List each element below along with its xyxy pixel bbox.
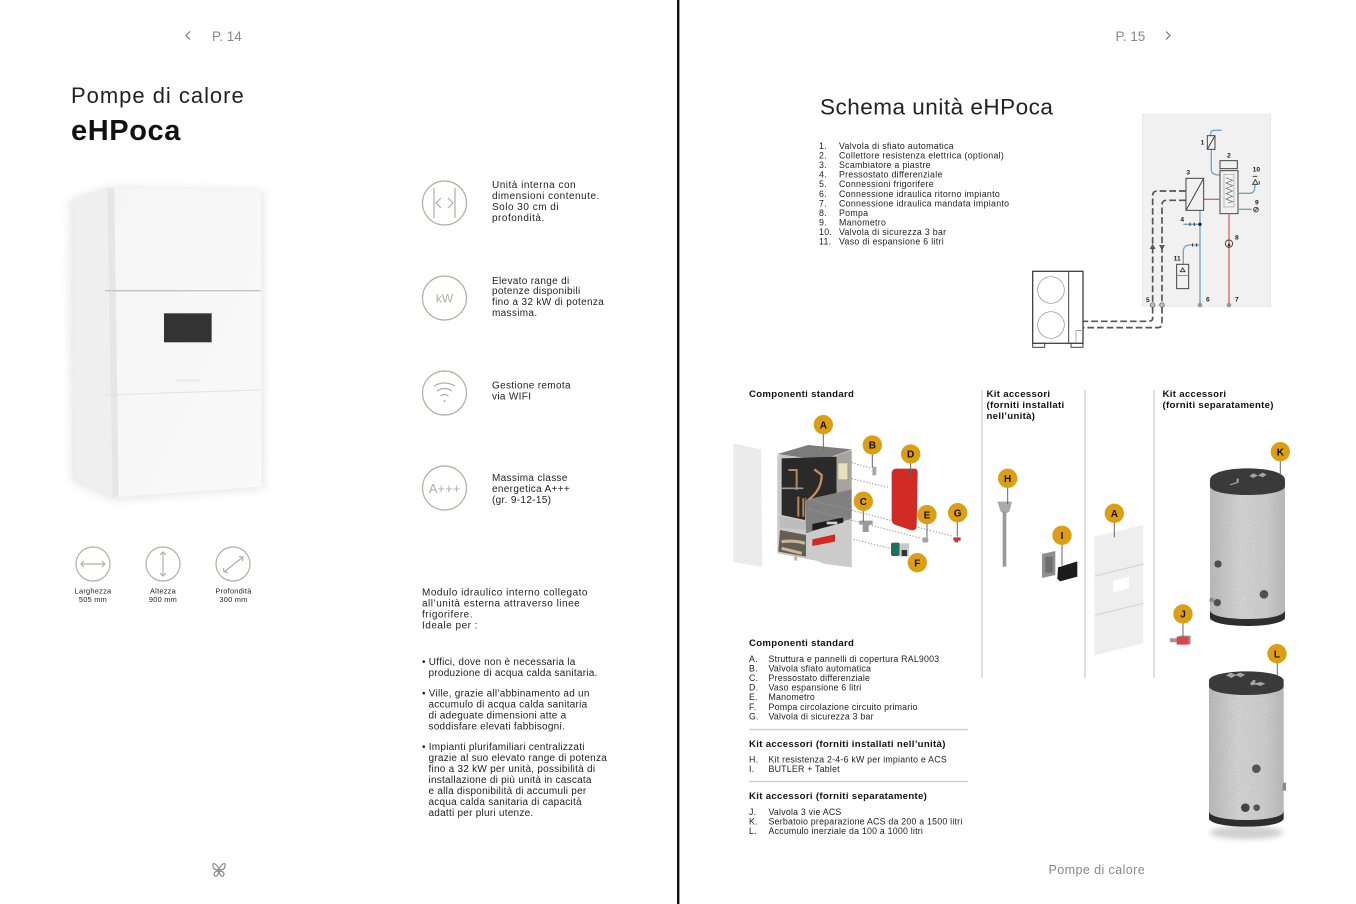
- feature: energy class: energetica A+++: [492, 484, 570, 495]
- feature: power: fino a 32 kW di potenza: [492, 297, 604, 308]
- diagram: hydraulic schema: 3: [1186, 169, 1190, 176]
- list: kit separati: [749, 782, 968, 836]
- column rules: [982, 390, 1154, 678]
- bullet: impianti: installazione di più unità in cascata: [428, 775, 592, 786]
- dimension: larghezza: 505 mm: [79, 595, 107, 604]
- bullet: ville: di adeguate dimensioni atte a: [428, 710, 567, 722]
- diagram: hydraulic schema: [1033, 114, 1271, 347]
- legend: schema parts: 6.: [819, 189, 827, 199]
- legend: schema parts: Connessione idraulica mandata impianto: [839, 198, 1009, 208]
- list: componenti standard: Valvola di sicurezza 3 bar: [768, 712, 874, 722]
- bullet: impianti: • Impianti plurifamiliari centralizzati: [422, 742, 585, 753]
- bullet: uffici: • Uffici, dove non è necessaria la: [422, 657, 576, 668]
- legend: schema parts: Valvola di sicurezza 3 bar: [839, 227, 946, 237]
- list: componenti standard: Manometro: [768, 692, 815, 702]
- diagram: hydraulic schema: 6: [1206, 296, 1210, 303]
- feature: power: [422, 276, 604, 320]
- title: Pompe di calore: Pompe di calore: [71, 83, 245, 108]
- list: componenti standard: Valvola sfiato automatica: [768, 664, 871, 674]
- dotted leaders: [805, 463, 952, 548]
- legend: schema parts: [819, 141, 1009, 246]
- tank L: L: [1274, 649, 1280, 660]
- intro text: Modulo idraulico interno collegato: [422, 588, 588, 598]
- front panel: [733, 443, 762, 567]
- list: componenti standard: F.: [749, 702, 756, 712]
- page number left: P. 14: [212, 29, 242, 44]
- legend: schema parts: 10.: [819, 227, 832, 237]
- vessel D: [892, 469, 918, 530]
- feature: wifi: [422, 371, 571, 415]
- unit body: [777, 445, 852, 567]
- dimension: larghezza: [75, 547, 112, 604]
- dimension: altezza: [146, 547, 180, 604]
- dimension: profondita: [215, 547, 252, 604]
- list: kit separati: Accumulo inerziale da 100 a 1000 litri: [768, 826, 923, 836]
- list: componenti standard: C.: [749, 673, 758, 683]
- list: kit installati: H.: [749, 754, 758, 764]
- diagram: hydraulic schema: 1: [1201, 140, 1205, 147]
- feature: dimensions: Unità interna con: [492, 180, 576, 191]
- tank L: [1209, 644, 1287, 839]
- list: componenti standard: E.: [749, 692, 758, 702]
- diagram: hydraulic schema: 10: [1253, 166, 1260, 173]
- list: componenti standard: Vaso espansione 6 litri: [768, 682, 861, 692]
- heading: kit installati: Kit accessori: [986, 389, 1050, 400]
- page number right: [1116, 29, 1170, 44]
- butler and tablet I: I: [1061, 531, 1064, 542]
- title: eHPoca: eHPoca: [71, 115, 181, 147]
- list: kit separati: L.: [749, 826, 757, 836]
- legend: schema parts: 4.: [819, 170, 827, 180]
- legend: schema parts: Vaso di espansione 6 litri: [839, 236, 944, 246]
- legend: schema parts: 3.: [819, 160, 827, 170]
- dimension: larghezza: Larghezza: [75, 586, 112, 596]
- list: kit installati: Kit accessori (forniti installati nell’unità): [749, 739, 946, 750]
- page number left: [186, 29, 242, 44]
- list: kit separati: Serbatoio preparazione ACS da 200 a 1500 litri: [768, 816, 962, 826]
- list: componenti standard: G.: [749, 712, 759, 722]
- bullet: impianti: acqua calda sanitaria di capacità: [428, 797, 582, 808]
- legend: schema parts: Collettore resistenza elettrica (optional): [839, 150, 1004, 160]
- bullet: impianti: grazie al suo elevato range di potenza: [428, 753, 607, 764]
- legend: schema parts: 5.: [819, 179, 827, 189]
- page number right: P. 15: [1116, 29, 1145, 44]
- list: componenti standard: Struttura e pannelli di copertura RAL9003: [768, 654, 939, 664]
- list: kit installati: I.: [749, 764, 754, 774]
- badges: A: [820, 420, 827, 431]
- feature: energy class: [422, 466, 570, 510]
- feature: dimensions: [422, 180, 600, 225]
- legend: schema parts: 8.: [819, 208, 827, 218]
- heading: kit separati: Kit accessori: [1162, 389, 1226, 400]
- tank K: [1209, 442, 1290, 626]
- badges: C: [860, 497, 867, 508]
- heading: kit installati: nell’unità): [986, 411, 1035, 422]
- badges: F: [914, 558, 920, 569]
- list: kit separati: K.: [749, 816, 758, 826]
- valve J: [1170, 604, 1193, 645]
- list: componenti standard: A.: [749, 654, 758, 664]
- intro text: all’unità esterna attraverso linee: [422, 598, 580, 610]
- legend: schema parts: 7.: [819, 198, 827, 208]
- legend: schema parts: 2.: [819, 150, 827, 160]
- dimension: profondita: 300 mm: [219, 595, 248, 604]
- feature: dimensions: dimensioni contenute.: [492, 191, 600, 202]
- feature: dimensions: Solo 30 cm di: [492, 202, 559, 213]
- bullet: ville: accumulo di acqua calda sanitaria: [428, 700, 588, 710]
- badges: D: [907, 450, 914, 461]
- intro text: Ideale per :: [422, 620, 478, 632]
- sensor H: [997, 469, 1017, 567]
- list: componenti standard: B.: [749, 664, 758, 674]
- accessories H I A J and tank K: [997, 442, 1290, 655]
- diagram: hydraulic schema: 7: [1235, 296, 1239, 303]
- dimension: altezza: 900 mm: [149, 595, 177, 604]
- list: componenti standard: [749, 638, 939, 722]
- badges: G: [954, 508, 962, 519]
- diagram: hydraulic schema: 9: [1255, 199, 1259, 206]
- legend: schema parts: Scambiatore a piastre: [839, 160, 931, 170]
- bullet: uffici: produzione di acqua calda sanitaria.: [428, 668, 598, 679]
- legend: schema parts: Connessione idraulica ritorno impianto: [839, 189, 1000, 199]
- feature: wifi: via WIFI: [492, 392, 531, 402]
- list: componenti standard: D.: [749, 682, 758, 692]
- valves and pump: [872, 467, 876, 475]
- legend: schema parts: Pompa: [839, 208, 868, 218]
- bullet: ville: • Ville, grazie all’abbinamento ad un: [422, 688, 590, 700]
- list: kit separati: Kit accessori (forniti separatamente): [749, 791, 927, 802]
- feature: power: kW: [436, 292, 454, 306]
- feature: power: potenze disponibili: [492, 286, 581, 297]
- feature: power: massima.: [492, 308, 537, 319]
- legend: schema parts: Valvola di sfiato automatica: [839, 141, 954, 151]
- cover panels A: A: [1111, 509, 1118, 520]
- intro text: frigorifere.: [422, 610, 473, 620]
- sensor H: H: [1004, 474, 1011, 485]
- cover panels A: [1094, 504, 1143, 655]
- product image: indoor unit: [70, 187, 264, 500]
- list: kit installati: BUTLER + Tablet: [768, 764, 840, 774]
- list: kit separati: Valvola 3 vie ACS: [768, 807, 842, 817]
- dimension: altezza: Altezza: [150, 586, 177, 596]
- legend: schema parts: Pressostato differenziale: [839, 170, 943, 180]
- legend: schema parts: 1.: [819, 141, 827, 151]
- feature: energy class: A+++: [429, 481, 460, 496]
- legend: schema parts: 9.: [819, 218, 827, 228]
- list: kit installati: Kit resistenza 2-4-6 kW per impianto e ACS: [768, 754, 947, 764]
- badges: E: [924, 510, 931, 521]
- feature: wifi: Gestione remota: [492, 380, 571, 392]
- feature: energy class: (gr. 9-12-15): [492, 495, 551, 506]
- list: kit separati: J.: [749, 807, 756, 817]
- footer label: Pompe di calore: [1048, 863, 1145, 877]
- feature: energy class: Massima classe: [492, 473, 568, 484]
- badges: B: [869, 441, 876, 452]
- bullet: ville: soddisfare elevati fabbisogni.: [428, 722, 565, 732]
- tank K: K: [1277, 447, 1285, 458]
- legend: schema parts: Connessioni frigorifere: [839, 179, 934, 189]
- butler and tablet I: [1042, 526, 1077, 581]
- list: componenti standard: Pressostato differenziale: [768, 673, 870, 683]
- feature: dimensions: profondità.: [492, 213, 545, 224]
- dimension: profondita: Profondità: [215, 586, 252, 596]
- heading: kit installati: (forniti installati: [986, 400, 1065, 411]
- bullet: impianti: adatti per pluri utenze.: [428, 808, 533, 819]
- list: componenti standard: Componenti standard: [749, 638, 854, 649]
- diagram: hydraulic schema: 11: [1174, 255, 1181, 262]
- diagram: hydraulic schema: 5: [1146, 297, 1150, 304]
- legend: schema parts: 11.: [819, 236, 831, 246]
- diagram: hydraulic schema: 2: [1227, 152, 1231, 159]
- bullet: impianti: fino a 32 kW per unità, possibilità di: [428, 764, 595, 775]
- title: Schema unita eHPoca: Schema unità eHPoca: [820, 94, 1053, 120]
- legend: schema parts: Manometro: [839, 218, 886, 228]
- exploded view: standard components: [733, 415, 967, 572]
- list: kit installati: [749, 730, 968, 774]
- heading: componenti standard: Componenti standard: [749, 389, 854, 400]
- badges: [814, 415, 967, 572]
- icon: butterfly logo: [213, 864, 225, 876]
- valve J: J: [1180, 610, 1186, 621]
- diagram: hydraulic schema: 4: [1180, 216, 1184, 223]
- bullet: impianti: e alla disponibilità di accumuli per: [428, 786, 587, 797]
- list: componenti standard: Pompa circolazione circuito primario: [768, 702, 918, 712]
- feature: power: Elevato range di: [492, 276, 570, 287]
- diagram: hydraulic schema: 8: [1235, 235, 1239, 242]
- page divider: [677, 0, 679, 904]
- heading: kit separati: (forniti separatamente): [1162, 400, 1274, 411]
